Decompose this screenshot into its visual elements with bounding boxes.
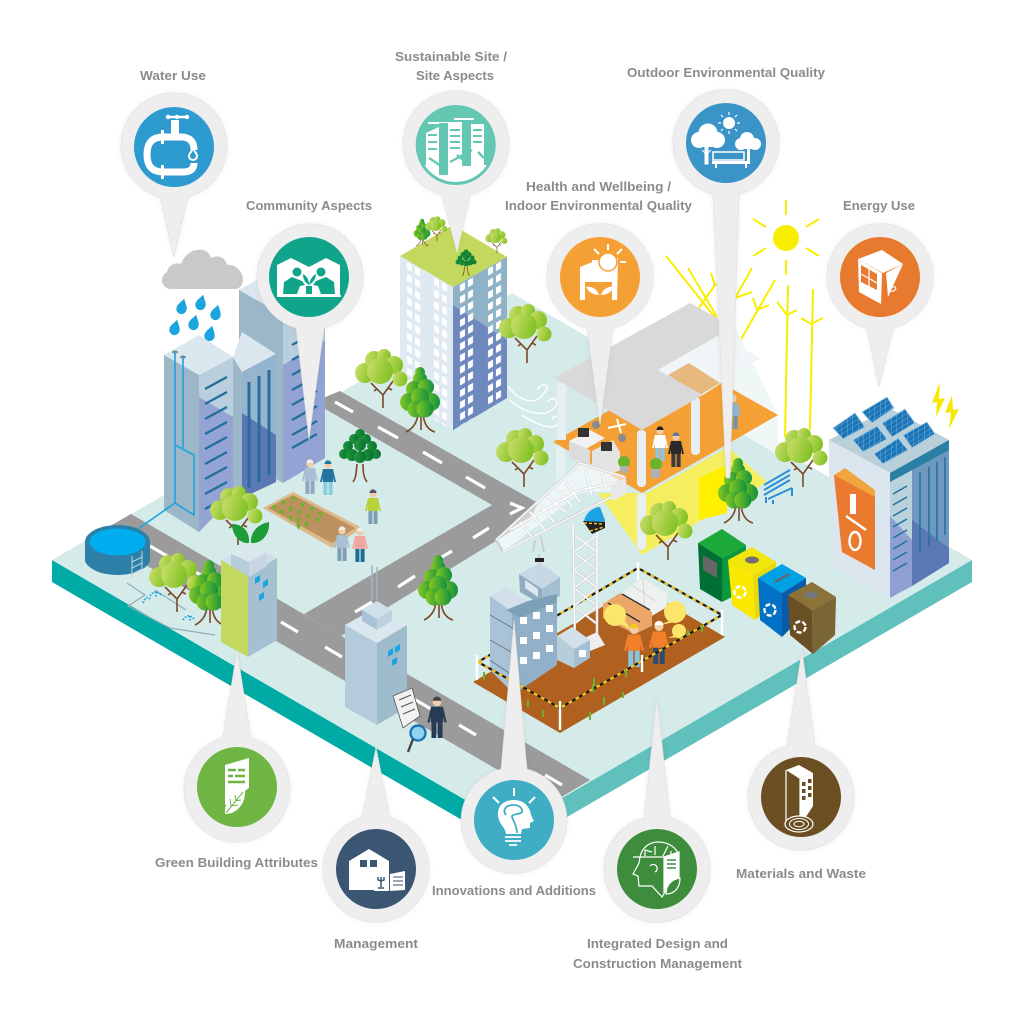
rooftop trees (414, 216, 507, 276)
icon: house and manual (349, 849, 405, 891)
icon: community house (277, 258, 341, 296)
grass sprouts (484, 625, 702, 720)
modular building block (490, 587, 590, 692)
lightning bolts (932, 382, 959, 429)
icon: tap and pipe (147, 115, 198, 179)
community people (302, 459, 381, 562)
label: Green Building Attributes: Green Building Attributes (155, 855, 318, 870)
fence front (478, 615, 722, 708)
icon: buildings and trees (424, 118, 487, 182)
tree front of road (418, 555, 458, 620)
left trees (149, 486, 262, 625)
tree near energy building (775, 428, 828, 487)
crane cab (583, 507, 605, 534)
pin: Innovations and Additions (461, 620, 567, 873)
switch panel (834, 468, 875, 570)
pin: Health and Wellbeing (547, 224, 653, 425)
irrigation pipes (127, 583, 215, 635)
pin: Outdoor Environmental Quality (673, 90, 779, 478)
office desks (569, 419, 626, 480)
pin: Management (323, 747, 429, 922)
icon: brain lightbulb (493, 788, 535, 845)
manager figure (427, 696, 447, 738)
rain cloud (162, 250, 243, 342)
label: Integrated Design and Construction Management: Integrated Design and (587, 936, 728, 951)
platform (52, 293, 972, 849)
label: Management: Management (334, 936, 419, 951)
crane jib (496, 463, 626, 552)
construction site (473, 463, 725, 733)
energy building (829, 397, 949, 598)
label: Outdoor Environmental Quality: Outdoor Environmental Quality (627, 65, 826, 80)
seed bed garden (263, 492, 362, 548)
tree near bench (718, 458, 758, 523)
water tank (85, 525, 150, 578)
bench (764, 470, 792, 504)
pin: Sustainable Site (403, 91, 509, 253)
recycling bins (698, 529, 836, 654)
wind lines (508, 385, 559, 427)
speech bubbles (604, 601, 686, 638)
sustainable site building (400, 225, 507, 430)
label: Sustainable Site / Site Aspects: Sustainable Site / (395, 49, 507, 64)
icon: building and leaf (225, 758, 249, 814)
street trees (339, 304, 552, 487)
sun and rays (666, 200, 823, 437)
water-harvesting buildings (135, 265, 325, 532)
label: Integrated Design and Construction Management (573, 936, 743, 971)
label: Innovations and Additions: Innovations and Additions (432, 883, 596, 898)
management building (345, 565, 407, 725)
label: Health and Wellbeing / Indoor Environmental Quality (505, 179, 693, 213)
pin: Materials and Waste (748, 650, 854, 850)
crane tower (570, 518, 605, 655)
icon: building from log (785, 765, 813, 832)
pin: Water Use (121, 93, 227, 257)
office people (652, 394, 741, 467)
workers (624, 621, 669, 667)
icon: building switch (858, 250, 903, 304)
label: Water Use: Water Use (140, 68, 206, 83)
pin: Energy Use (827, 224, 933, 387)
green attributes building (221, 522, 277, 657)
label: Community Aspects: Community Aspects (246, 198, 372, 213)
label: Health and Wellbeing / Indoor Environmental Quality: Indoor Environmental Quality (505, 198, 693, 213)
label: Materials and Waste: Materials and Waste (736, 866, 866, 881)
pin: Green Building Attributes (184, 650, 290, 842)
sprinklers (143, 592, 195, 622)
tree front of house (640, 501, 692, 560)
crane hook and load (519, 537, 560, 605)
icon: house with sun (580, 244, 626, 300)
solar panels (833, 397, 935, 464)
pin: Integrated Design (604, 697, 710, 922)
pallets (603, 578, 667, 634)
label: Sustainable Site / Site Aspects (395, 49, 507, 83)
icon: head with building (633, 842, 680, 897)
potted plants (618, 456, 662, 478)
roads (94, 391, 590, 802)
pin: Community Aspects (257, 224, 363, 440)
label: Sustainable Site / Site Aspects: Site Aspects (416, 68, 494, 83)
label: Energy Use: Energy Use (843, 198, 915, 213)
label: Integrated Design and Construction Management: Construction Management (573, 956, 743, 971)
checklist and magnifier (393, 688, 426, 752)
label: Health and Wellbeing / Indoor Environmental Quality: Health and Wellbeing / (526, 179, 671, 194)
icon: park with bench (691, 112, 761, 168)
fence back (478, 568, 722, 662)
healthy building (553, 303, 778, 555)
